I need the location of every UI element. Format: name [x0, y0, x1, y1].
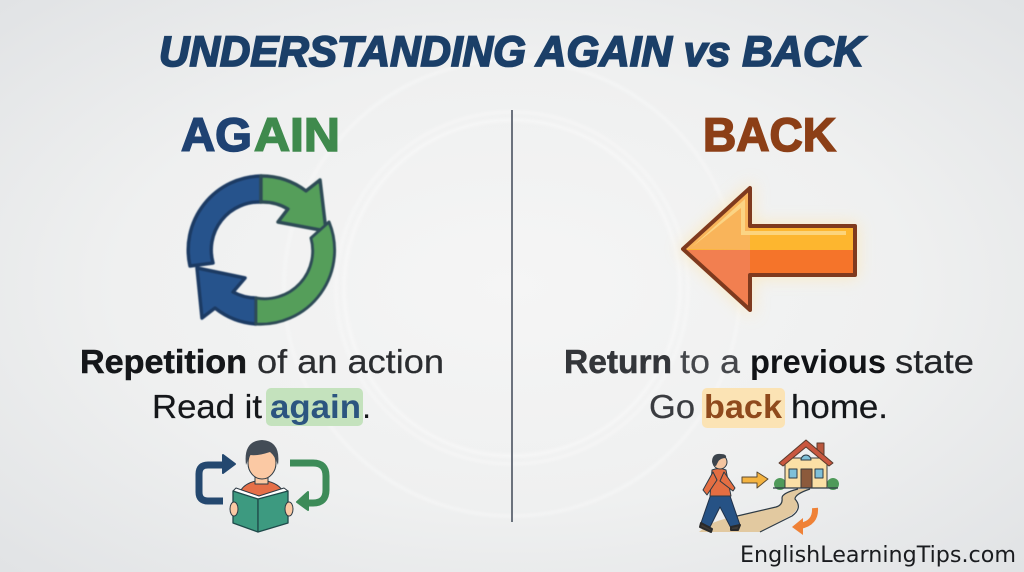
- center divider: [511, 110, 513, 522]
- definition: back: state: [895, 343, 974, 380]
- icon: left arrow: [683, 188, 855, 310]
- website credit: EnglishLearningTips.com: [740, 543, 1016, 568]
- example: back: [649, 388, 888, 428]
- definition: back: Return: [564, 343, 672, 380]
- definition: again: of an action: [257, 343, 444, 380]
- example: again: [152, 388, 371, 426]
- heading: again: [181, 108, 340, 161]
- definition: back: [564, 343, 974, 380]
- example: again: .: [362, 388, 371, 425]
- definition: again: Repetition: [80, 343, 247, 380]
- definition: back: previous: [750, 343, 886, 380]
- example: back: home.: [791, 388, 888, 425]
- icon: person walking home: [699, 440, 839, 535]
- heading: again: AG: [181, 108, 252, 161]
- heading: back: BACK: [703, 108, 836, 161]
- heading: again: AIN: [254, 108, 340, 161]
- watermark seal: [284, 60, 740, 516]
- example: back: Go: [649, 388, 695, 425]
- definition: back: to a: [680, 343, 741, 380]
- example: back: back: [704, 388, 783, 425]
- icon: person reading: [199, 440, 326, 532]
- definition: again: [80, 343, 444, 380]
- panel: back: [564, 108, 974, 535]
- title: UNDERSTANDING AGAIN vs BACK: [159, 28, 867, 76]
- example: again: Read it: [152, 388, 262, 425]
- panel: again: [80, 108, 444, 532]
- icon: circular arrows: [188, 176, 335, 324]
- example: again: again: [270, 388, 361, 425]
